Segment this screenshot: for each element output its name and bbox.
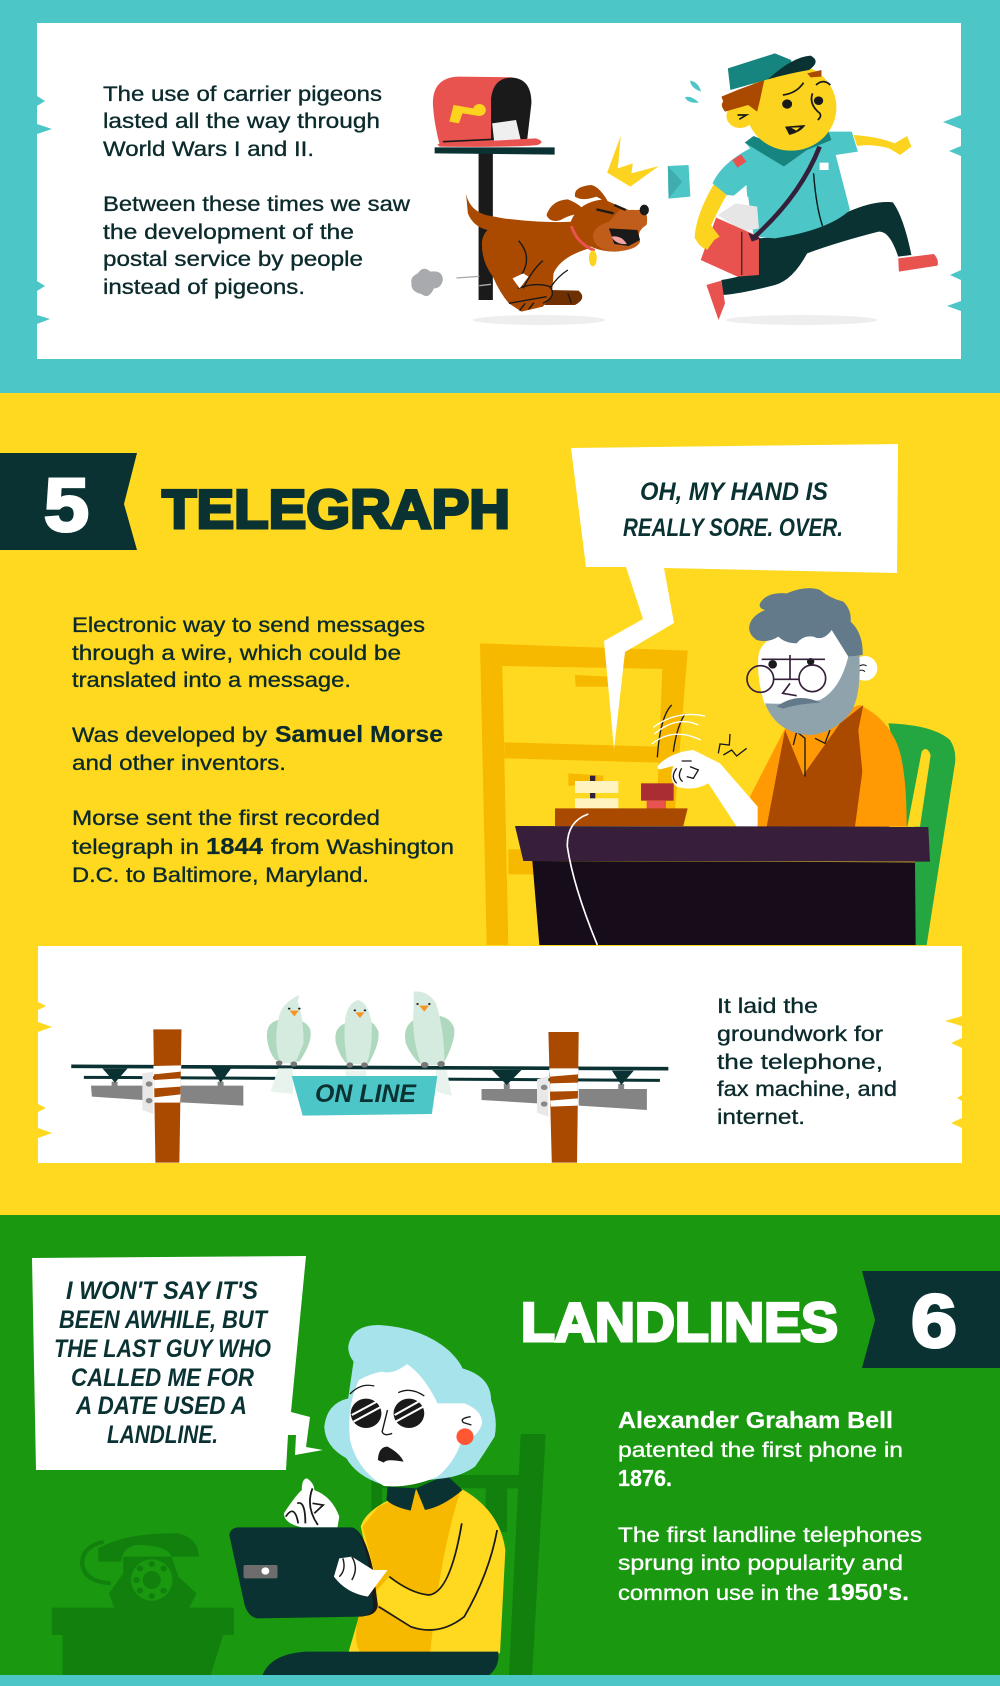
illustration: telegraph operator at desk bbox=[480, 588, 955, 945]
text: telegraph facts: Morse sent the first recorded bbox=[72, 807, 380, 830]
woman body bbox=[262, 1488, 505, 1675]
speech bubble: date: BEEN AWHILE, BUT bbox=[59, 1306, 269, 1334]
text: landline facts: 1876. bbox=[618, 1465, 672, 1491]
speech bubble: date: I WON'T SAY IT'S bbox=[66, 1277, 258, 1305]
text: pigeons and postal service: World Wars I and II. bbox=[103, 138, 314, 161]
text: telegraph facts: and other inventors. bbox=[72, 752, 286, 775]
text: pigeons and postal service bbox=[103, 83, 411, 299]
shelf bbox=[480, 643, 688, 945]
banner: number 5: 5 bbox=[44, 463, 89, 547]
text: landline facts: common use in the bbox=[618, 1582, 819, 1605]
icon: hand on tablet bbox=[334, 1557, 387, 1597]
speech bubble: sore hand: OH, MY HAND IS bbox=[640, 478, 828, 506]
wires and insulators bbox=[71, 1066, 668, 1090]
icon: mailbox bbox=[433, 77, 555, 300]
motion lines bbox=[657, 705, 747, 757]
operator bbox=[657, 588, 907, 827]
heading: landlines: LANDLINES bbox=[521, 1291, 838, 1353]
text: landline facts: 1950's. bbox=[827, 1579, 909, 1605]
text: pigeons and postal service: Between these times we saw bbox=[103, 193, 411, 216]
pole: left bbox=[91, 1029, 243, 1163]
icon: bird right bbox=[405, 991, 454, 1096]
banner: number 6: 6 bbox=[911, 1279, 957, 1363]
icon: dust cloud bbox=[411, 269, 491, 296]
text: pigeons and postal service: lasted all the way through bbox=[103, 110, 380, 133]
speech bubble: sore hand bbox=[571, 444, 898, 749]
text: telegraph facts: 1844 bbox=[206, 833, 263, 859]
panel: telephone wires bbox=[38, 946, 962, 1163]
text: telegraph facts: Samuel Morse bbox=[275, 721, 443, 747]
text: telegraph facts bbox=[72, 614, 454, 887]
shadows bbox=[473, 315, 877, 325]
text: groundwork: It laid the bbox=[717, 995, 818, 1018]
text: pigeons and postal service: the development of the bbox=[103, 221, 354, 244]
text: telegraph facts: through a wire, which could be bbox=[72, 642, 401, 665]
pole: right bbox=[482, 1032, 647, 1163]
text: pigeons and postal service: The use of carrier pigeons bbox=[103, 83, 382, 106]
chair bbox=[888, 723, 955, 945]
desk bbox=[515, 814, 930, 945]
sign plate bbox=[292, 1076, 437, 1116]
speech bubble: date: CALLED ME FOR bbox=[71, 1364, 254, 1392]
text: telegraph facts: Was developed by bbox=[72, 724, 268, 747]
sign text: on line: ON LINE bbox=[315, 1080, 417, 1108]
speech bubble: sore hand: REALLY SORE. OVER. bbox=[623, 514, 843, 542]
banner: number 5 bbox=[0, 453, 137, 550]
heading: telegraph: TELEGRAPH bbox=[162, 478, 510, 540]
icon: tablet bbox=[229, 1527, 378, 1618]
speech bubble: date: A DATE USED A bbox=[75, 1392, 247, 1420]
text: telegraph facts: Electronic way to send messages bbox=[72, 614, 425, 637]
text: groundwork: fax machine, and bbox=[717, 1078, 897, 1101]
icon: flying letter bbox=[668, 165, 690, 199]
icon: raised hand bbox=[284, 1478, 339, 1527]
illustration: birds on line with poles bbox=[71, 991, 668, 1163]
text: landline facts: Alexander Graham Bell bbox=[618, 1407, 893, 1433]
icon: bird middle bbox=[335, 1000, 379, 1077]
text: telegraph facts: from Washington bbox=[271, 836, 454, 859]
illustration: mailbox and dog chasing mailman bbox=[411, 53, 938, 325]
text: landline facts: The first landline telephones bbox=[618, 1524, 922, 1547]
illustration: woman with tablet and old phone bbox=[52, 1325, 546, 1675]
icon: dog bbox=[466, 185, 649, 312]
silhouette: rotary phone on table bbox=[52, 1533, 234, 1675]
text: pigeons and postal service: instead of pigeons. bbox=[103, 276, 305, 299]
text: landline facts: sprung into popularity and bbox=[618, 1552, 903, 1575]
telegraph key bbox=[555, 776, 688, 826]
text: telegraph facts: D.C. to Baltimore, Maryland. bbox=[72, 864, 369, 887]
banner: number 6 bbox=[862, 1271, 1000, 1368]
speech bubble: date bbox=[32, 1256, 323, 1470]
speech bubble: date: LANDLINE. bbox=[107, 1421, 218, 1449]
text: landline facts bbox=[618, 1407, 922, 1605]
panel: postal service bbox=[37, 23, 961, 359]
text: telegraph facts: telegraph in bbox=[72, 836, 199, 859]
text: groundwork: internet. bbox=[717, 1106, 805, 1129]
icon: bird left bbox=[267, 995, 311, 1094]
text: telegraph facts: translated into a message. bbox=[72, 669, 351, 692]
icon: bark burst bbox=[607, 136, 659, 187]
silhouette: chair bbox=[371, 1434, 546, 1675]
text: groundwork: the telephone, bbox=[717, 1051, 883, 1074]
text: groundwork bbox=[717, 995, 897, 1129]
icon: mailman bbox=[695, 53, 938, 320]
woman head bbox=[324, 1325, 496, 1511]
text: landline facts: patented the first phone in bbox=[618, 1439, 903, 1462]
icon: sweat drops bbox=[685, 81, 701, 103]
text: groundwork: groundwork for bbox=[717, 1023, 883, 1046]
text: pigeons and postal service: postal service by people bbox=[103, 248, 363, 271]
speech bubble: date: THE LAST GUY WHO bbox=[54, 1335, 271, 1363]
